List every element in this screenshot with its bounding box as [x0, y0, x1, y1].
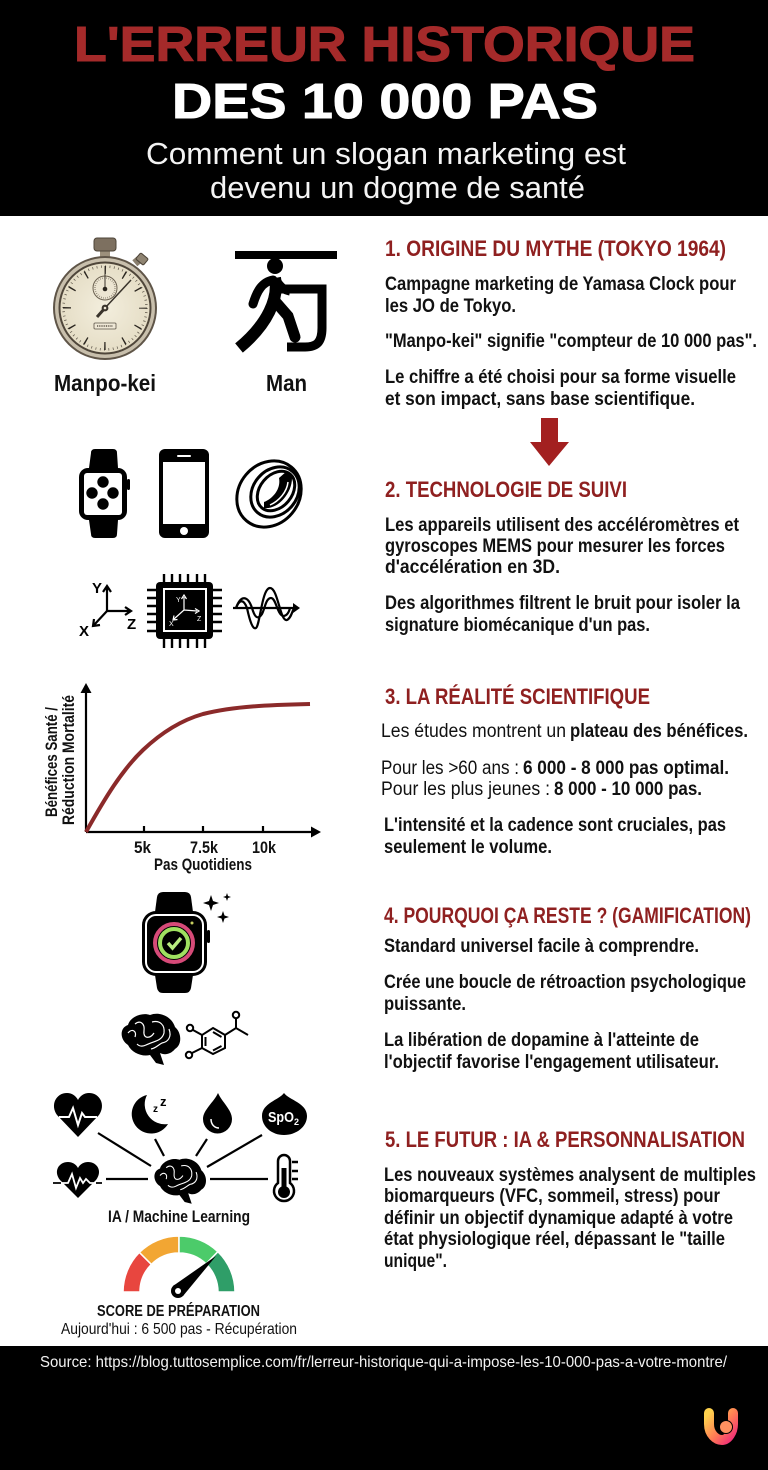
- body text 3: Pour les plus jeunes :: [381, 779, 550, 800]
- icon: SpO2 drop: 2: [294, 1117, 299, 1127]
- heading 3: 3. LA RÉALITÉ SCIENTIFIQUE: [385, 684, 650, 709]
- icon: sleep moon: [132, 1094, 168, 1134]
- label: machine learning: IA / Machine Learning: [108, 1207, 250, 1226]
- body text 3: 8 000 - 10 000 pas.: [554, 779, 702, 800]
- chart axis labels: 10k: [252, 839, 277, 857]
- connector lines: [98, 1133, 268, 1179]
- icon: MEMS chip: Z: [197, 616, 202, 623]
- icon: xyz axes: [79, 580, 136, 640]
- body text 4: l'objectif favorise l'engagement utilisateur.: [384, 1052, 719, 1073]
- icon: MEMS chip: Y: [176, 597, 181, 604]
- footer band: [0, 1346, 768, 1470]
- body text 2: signature biomécanique d'un pas.: [385, 615, 650, 636]
- icon: dopamine molecule: [186, 1012, 248, 1058]
- icon: xyz axes: Y: [92, 580, 102, 597]
- title: L'ERREUR HISTORIQUE: [74, 18, 695, 72]
- body text 3: Pour les >60 ans :: [381, 758, 519, 779]
- labels: Manpo-kei and Man: Man: [266, 370, 307, 396]
- labels: Manpo-kei and Man: Manpo-kei: [54, 370, 156, 396]
- panel: section 4 text: [384, 903, 751, 1073]
- chart axis labels: 5k: [134, 839, 152, 857]
- title: [74, 18, 695, 129]
- icon: SpO2 drop: SpO: [268, 1109, 294, 1126]
- gauge labels: [61, 1301, 297, 1338]
- gauge labels: SCORE DE PRÉPARATION: [97, 1301, 260, 1320]
- body text 3: plateau des bénéfices.: [570, 721, 748, 742]
- chart curve: [86, 704, 310, 832]
- icon: sleep moon: z: [160, 1094, 167, 1109]
- labels: Manpo-kei and Man: [54, 370, 307, 396]
- icon: brain: [122, 1014, 180, 1065]
- body text 3: seulement le volume.: [384, 837, 552, 858]
- gauge labels: Aujourd'hui : 6 500 pas - Récupération: [61, 1321, 297, 1338]
- subtitle: Comment un slogan marketing est: [146, 136, 626, 171]
- body text 3: 6 000 - 8 000 pas optimal.: [523, 758, 729, 779]
- icon: stopwatch: [53, 238, 157, 360]
- body text 5: [384, 1165, 756, 1272]
- gauge needle: [171, 1256, 216, 1298]
- chart: benefits plateau curve: [43, 683, 321, 874]
- diagram: AI biomarker network: [53, 1093, 307, 1226]
- panel: section 2 text: [385, 477, 740, 636]
- heading 1: 1. ORIGINE DU MYTHE (TOKYO 1964): [385, 236, 726, 261]
- icon: heart variability: [53, 1162, 102, 1198]
- body text 5: unique".: [384, 1251, 447, 1272]
- icon: central AI brain: [154, 1159, 206, 1204]
- panel: section 3 text: [381, 684, 748, 858]
- icon: SpO2 drop: [262, 1093, 307, 1135]
- body text 4: [384, 936, 746, 1073]
- body text 4: La libération de dopamine à l'atteinte de: [384, 1030, 699, 1051]
- body text 1: les JO de Tokyo.: [385, 296, 516, 317]
- icon: brand logo: [709, 1413, 733, 1440]
- icon: heart rate: [54, 1093, 102, 1137]
- chart axis labels: Réduction Mortalité: [60, 695, 78, 825]
- icon: stress drop: [203, 1093, 232, 1134]
- icon: xyz axes: X: [79, 623, 89, 640]
- icon: MEMS chip: X: [169, 621, 174, 628]
- icon: smart ring: [224, 448, 314, 540]
- chart axis labels: Bénéfices Santé /: [43, 707, 61, 817]
- subtitle: [146, 136, 626, 205]
- icon: smartphone: [159, 449, 209, 538]
- icon: smartwatch: [79, 449, 130, 538]
- arrow: down: [530, 418, 569, 466]
- icon: man kanji walker: [235, 251, 337, 348]
- icon: signal wave: [233, 588, 300, 628]
- source text: Source: https://blog.tuttosemplice.com/fr/lerreur-historique-qui-a-impose-les-10-000-pas-a-votre-montre/: [40, 1354, 728, 1371]
- icon: activity watch with sparkles: [142, 892, 231, 993]
- chart axes: [80, 683, 321, 838]
- body text 3: Les études montrent un: [381, 721, 566, 742]
- gauge: readiness score: [61, 1236, 297, 1338]
- body text 2: [385, 515, 740, 636]
- icon: MEMS chip: [147, 574, 222, 648]
- icon: sleep moon: z: [153, 1104, 158, 1115]
- panel: section 5 text: [384, 1127, 756, 1272]
- chart axis labels: Pas Quotidiens: [154, 856, 252, 874]
- body text 4: puissante.: [384, 994, 466, 1015]
- header band: [0, 0, 768, 216]
- body text 1: et son impact, sans base scientifique.: [385, 389, 695, 410]
- title: DES 10 000 PAS: [172, 75, 598, 129]
- body text 2: d'accélération en 3D.: [385, 557, 560, 578]
- panel: section 1 text: [385, 236, 757, 410]
- subtitle: devenu un dogme de santé: [210, 170, 585, 205]
- body text 5: biomarqueurs (VFC, sommeil, stress) pour: [384, 1186, 721, 1207]
- body text 3: [381, 721, 748, 858]
- chart axis labels: 7.5k: [190, 839, 219, 857]
- chart axis labels: [43, 695, 277, 874]
- icon: thermometer: [274, 1155, 298, 1201]
- icon: xyz axes: Z: [127, 616, 136, 633]
- body text 1: [385, 274, 757, 410]
- body text 3: L'intensité et la cadence sont cruciales, pas: [384, 815, 726, 836]
- body text 5: état physiologique réel, dépassant le "taille: [384, 1229, 725, 1250]
- body text 4: Standard universel facile à comprendre.: [384, 936, 699, 957]
- body text 2: gyroscopes MEMS pour mesurer les forces: [385, 536, 725, 557]
- heading 2: 2. TECHNOLOGIE DE SUIVI: [385, 477, 627, 502]
